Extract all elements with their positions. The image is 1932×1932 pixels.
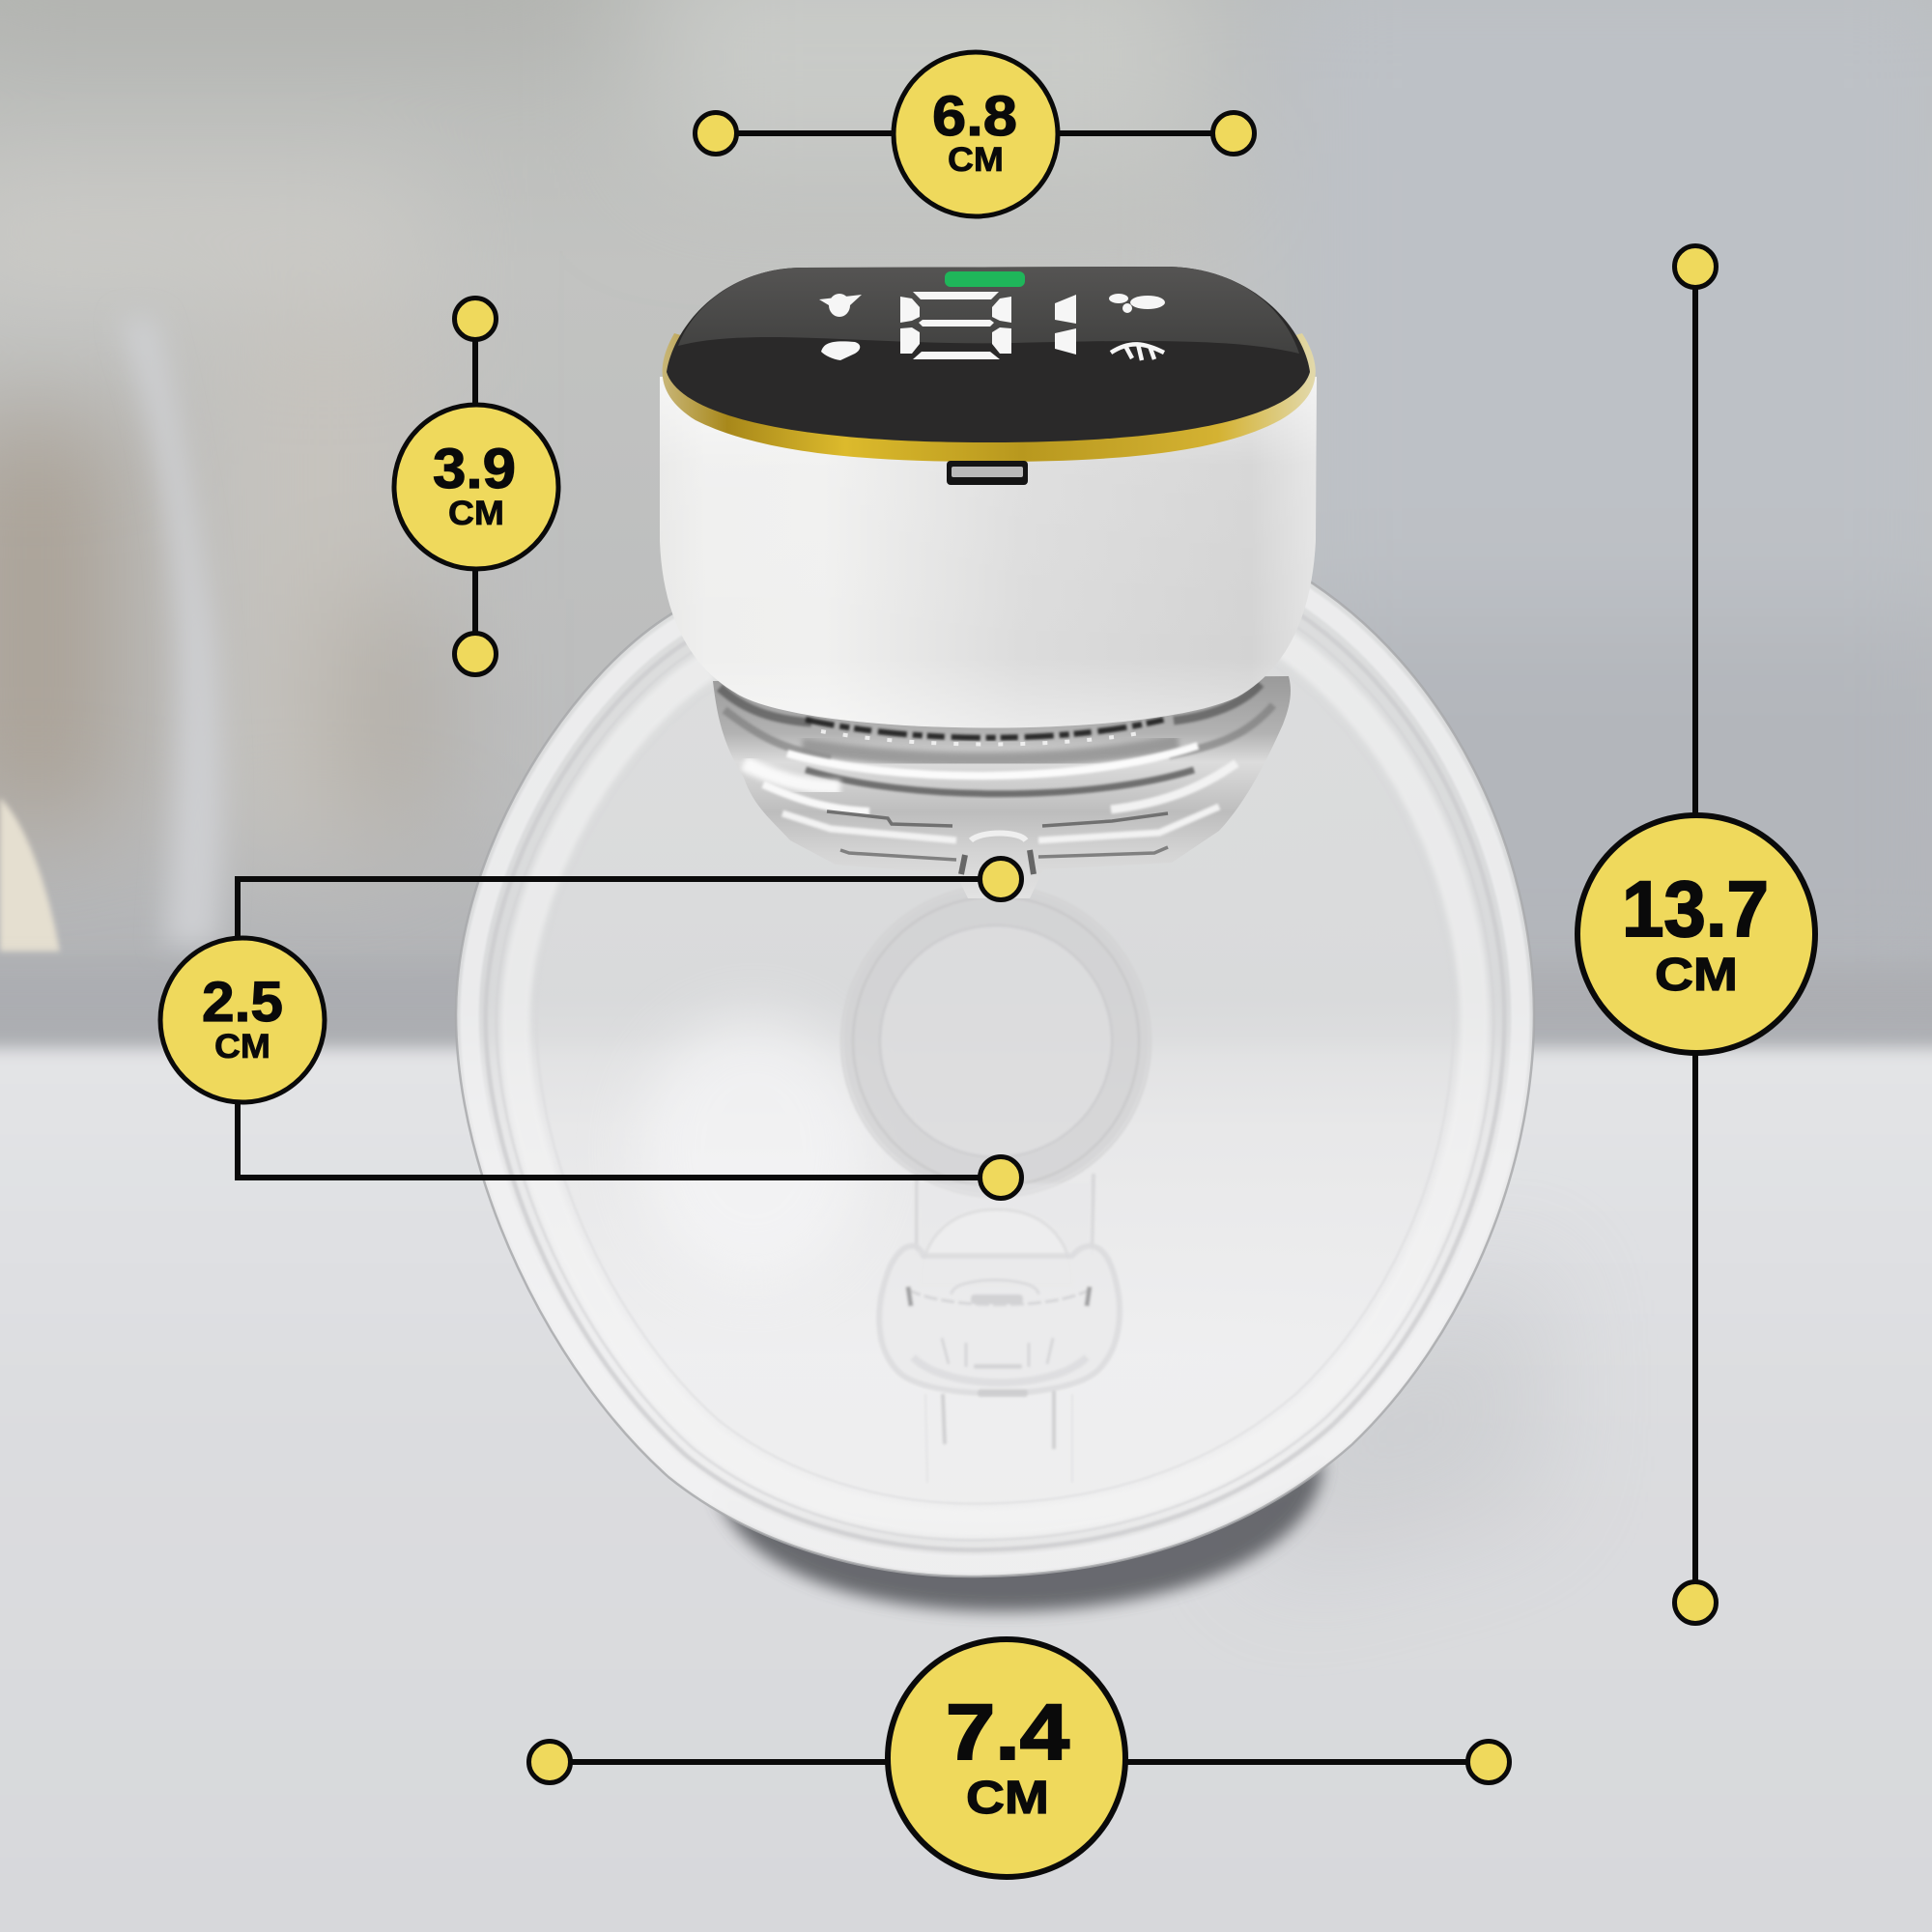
- dimension: 13.7 cm height: [1577, 245, 1815, 1623]
- icon: diamond: [821, 341, 860, 360]
- dimension: 6.8 cm width: 6.8: [932, 85, 1017, 148]
- shadow beneath flange: [715, 1256, 1546, 1611]
- LED digit 1: [1055, 295, 1076, 355]
- flange: transparent breast shield: [456, 575, 1534, 1577]
- dimension: 3.9 cm height: [394, 298, 558, 674]
- dimension: 13.7 cm height: 13.7: [1622, 866, 1769, 953]
- top reflection: [678, 267, 1299, 354]
- black control top: [667, 267, 1310, 442]
- icon: droplets: [1109, 294, 1165, 313]
- dimension: 2.5 cm tunnel: CM: [214, 1028, 270, 1065]
- USB charging port: [947, 461, 1028, 485]
- dimension: 7.4 cm width: CM: [966, 1773, 1049, 1824]
- inner ring of flange tunnel: [841, 886, 1151, 1197]
- power indicator green: [945, 271, 1025, 287]
- dimension: 3.9 cm height: 3.9: [433, 438, 516, 500]
- threaded glass collar: [705, 676, 1304, 903]
- dimension: 3.9 cm height: CM: [448, 495, 504, 532]
- motor body: [660, 377, 1317, 728]
- icon: mode bug: [819, 294, 862, 317]
- dimension: 6.8 cm width: [696, 52, 1254, 216]
- dimension: 13.7 cm height: CM: [1655, 950, 1738, 1001]
- dimension: 2.5 cm tunnel: [160, 858, 1022, 1198]
- dimension: 7.4 cm width: [529, 1639, 1509, 1877]
- dimension: 7.4 cm width: 7.4: [946, 1689, 1069, 1776]
- dimension: 2.5 cm tunnel: 2.5: [202, 971, 283, 1034]
- dimension: 6.8 cm width: CM: [948, 141, 1004, 179]
- icon: massage wave: [1111, 344, 1164, 360]
- valve stem and duckbill: [879, 1174, 1120, 1483]
- LED digit 0: [900, 292, 1011, 359]
- gold rim: [663, 333, 1316, 462]
